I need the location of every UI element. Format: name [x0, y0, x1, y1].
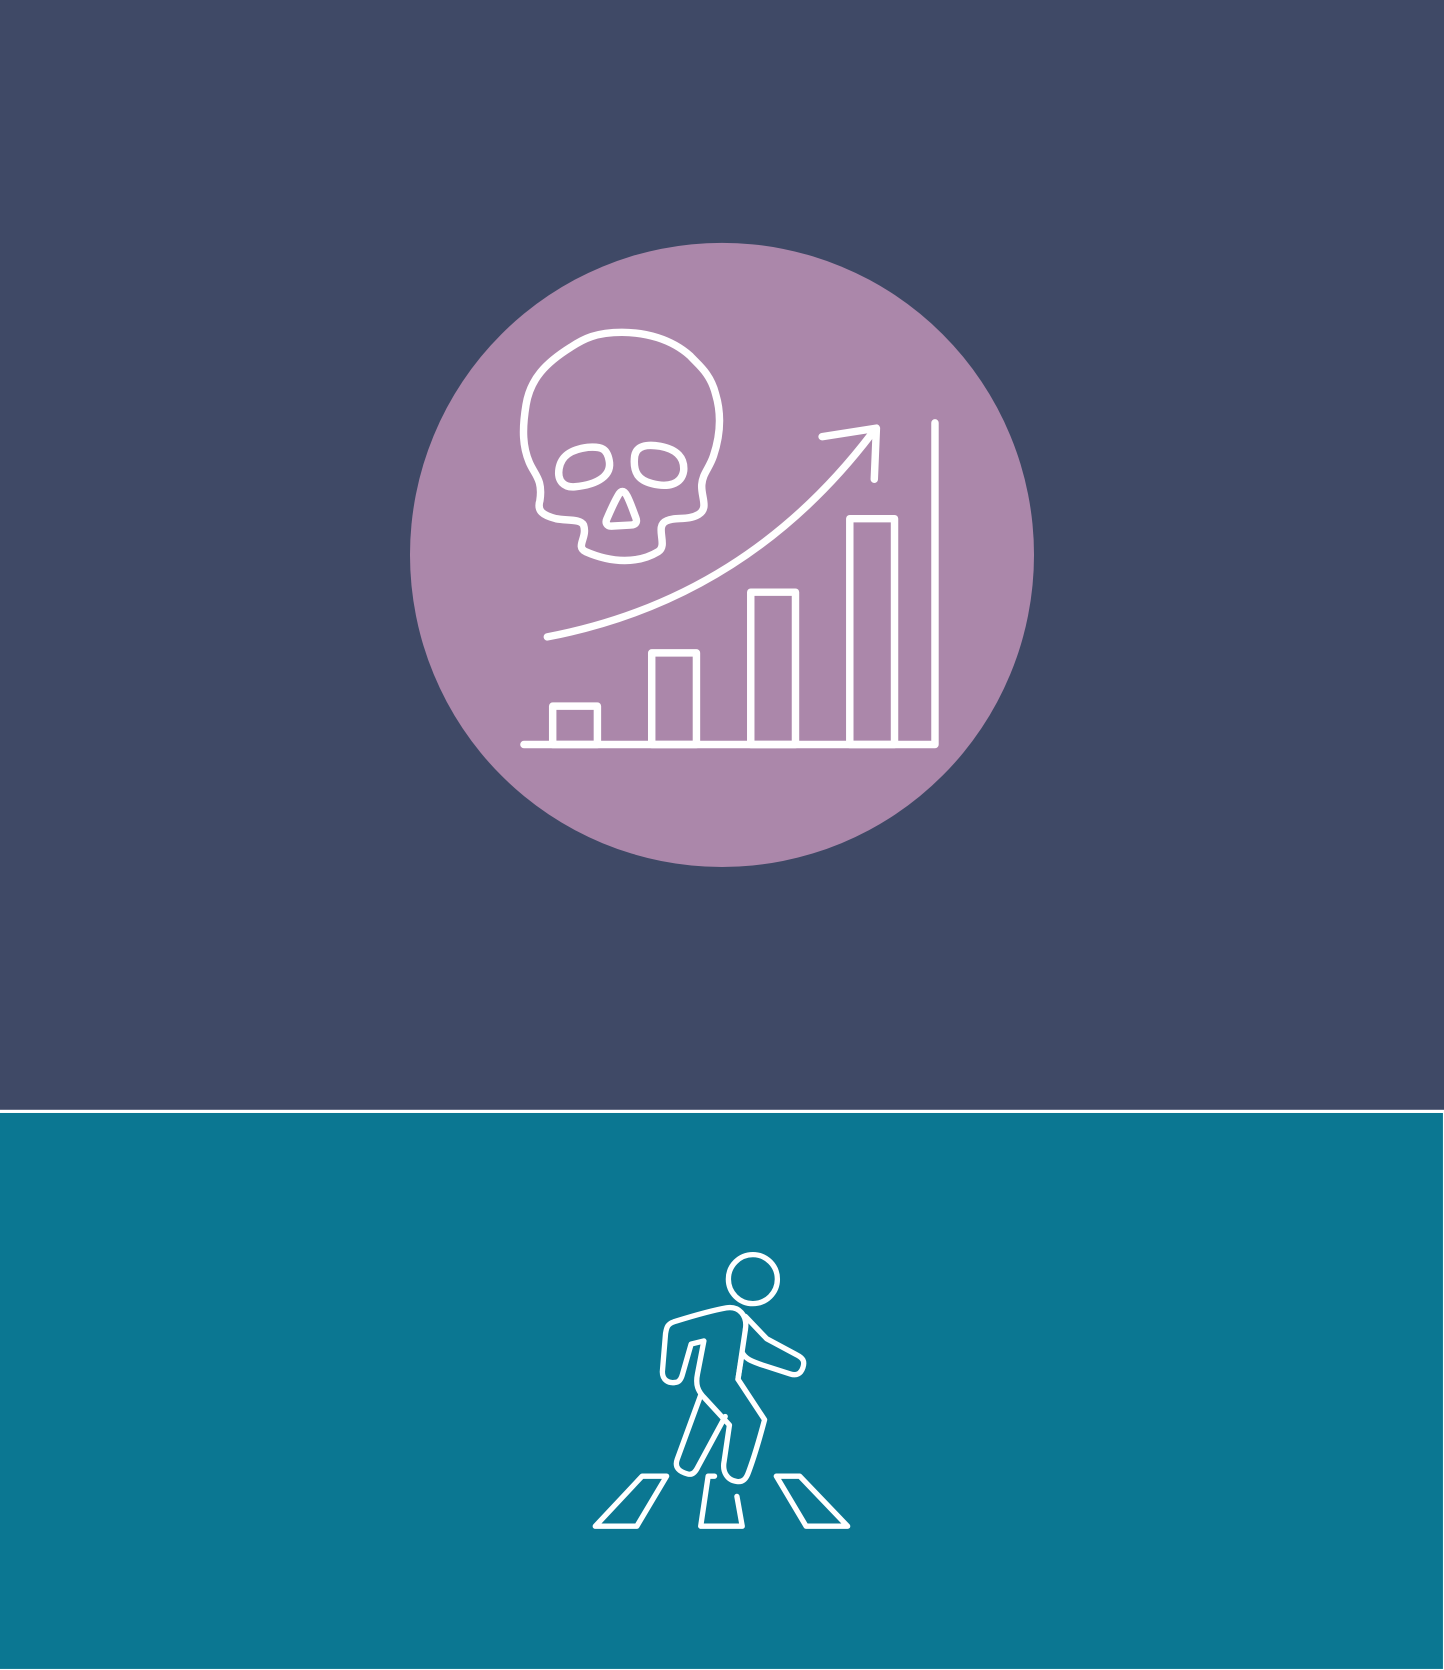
icon: circle with skull and rising chart [410, 243, 1034, 867]
bar chart [524, 423, 935, 744]
icon: skull [524, 332, 719, 560]
arrow: rising trend [547, 428, 876, 637]
icon: pedestrian on crosswalk [595, 1255, 848, 1526]
panel: top dark [0, 0, 1444, 1110]
panel: bottom teal [0, 1113, 1443, 1669]
